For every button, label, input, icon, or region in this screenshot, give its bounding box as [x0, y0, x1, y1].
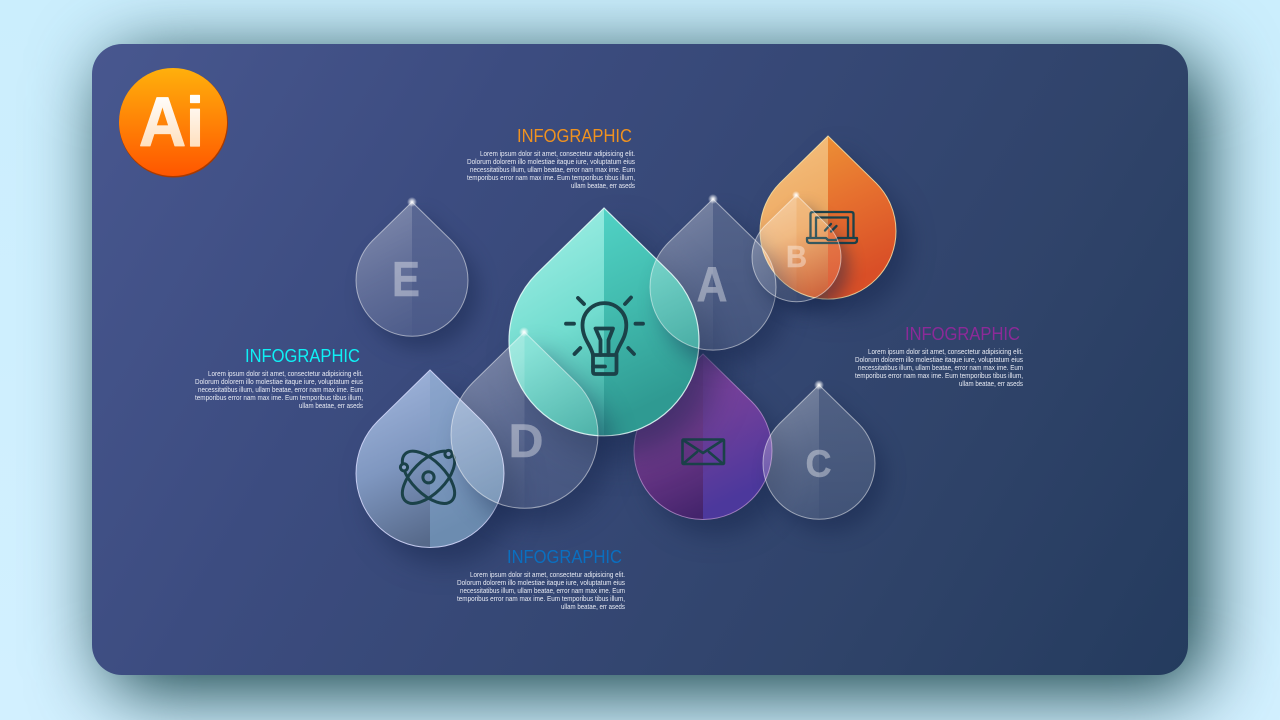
text block: orange, top: INFOGRAPHIC — [517, 125, 632, 146]
panel: main card — [92, 44, 1188, 675]
text block: blue, bottom — [457, 546, 625, 611]
letter D: D — [508, 415, 544, 468]
text block: cyan, left: Dolorum dolorem illo molestiae itaque iure, voluptatum eius — [195, 378, 363, 386]
icon: atom — [393, 442, 464, 512]
text block: cyan, left: necessitatibus illum, ullam beatae, error nam max ime. Eum — [198, 386, 363, 394]
text block: blue, bottom: temporibus error nam max ime. Eum temporibus tibus illum, — [457, 595, 625, 603]
drop: purple with envelope icon — [634, 354, 772, 519]
glint D — [519, 327, 529, 337]
drop: blue with atom icon — [356, 370, 504, 547]
drop: teal with lightbulb icon — [509, 208, 699, 436]
text block: orange, top: Lorem ipsum dolor sit amet, consectetur adipisicing elit. — [480, 150, 635, 158]
text block: orange, top — [467, 125, 635, 190]
icon: envelope — [682, 440, 724, 464]
glass drop A — [650, 199, 776, 350]
text block: cyan, left: ullam beatae, err aseds — [299, 402, 363, 410]
text block: orange, top: temporibus error nam max ime. Eum temporibus tibus illum, — [467, 174, 635, 182]
text block: blue, bottom: Lorem ipsum dolor sit amet, consectetur adipisicing elit. — [470, 571, 625, 579]
text block: blue, bottom: necessitatibus illum, ullam beatae, error nam max ime. Eum — [460, 587, 625, 595]
glint B — [792, 191, 800, 199]
icon: laptop — [807, 212, 857, 243]
text block: orange, top: necessitatibus illum, ullam beatae, error nam max ime. Eum — [470, 166, 635, 174]
glint A — [708, 194, 718, 204]
letter E: E — [392, 253, 420, 307]
letter C: C — [806, 444, 832, 486]
text block: purple, right: INFOGRAPHIC — [905, 323, 1020, 344]
icon: Adobe Illustrator logo — [119, 68, 228, 178]
drop: orange with laptop icon — [760, 136, 896, 299]
text block: blue, bottom: INFOGRAPHIC — [507, 546, 622, 567]
text block: cyan, left — [195, 345, 363, 410]
letter B: B — [786, 239, 807, 274]
letter A: A — [696, 258, 728, 312]
text block: cyan, left: INFOGRAPHIC — [245, 345, 360, 366]
glass drop D — [451, 332, 598, 508]
text block: cyan, left: temporibus error nam max ime. Eum temporibus tibus illum, — [195, 394, 363, 402]
text block: purple, right — [855, 323, 1023, 388]
text block: purple, right: Lorem ipsum dolor sit amet, consectetur adipisicing elit. — [868, 348, 1023, 356]
glass drop B — [752, 195, 841, 302]
text block: blue, bottom: ullam beatae, err aseds — [561, 603, 625, 611]
icon: lightbulb — [566, 298, 643, 374]
card shadow — [107, 59, 1203, 690]
text block: purple, right: temporibus error nam max ime. Eum temporibus tibus illum, — [855, 372, 1023, 380]
glass drop E — [356, 202, 468, 336]
text block: orange, top: ullam beatae, err aseds — [571, 182, 635, 190]
glint E — [407, 197, 417, 207]
text block: purple, right: necessitatibus illum, ullam beatae, error nam max ime. Eum — [858, 364, 1023, 372]
text block: cyan, left: Lorem ipsum dolor sit amet, consectetur adipisicing elit. — [208, 370, 363, 378]
text block: purple, right: ullam beatae, err aseds — [959, 380, 1023, 388]
icon: Adobe Illustrator logo: Ai — [139, 83, 204, 161]
text block: purple, right: Dolorum dolorem illo molestiae itaque iure, voluptatum eius — [855, 356, 1023, 364]
text block: orange, top: Dolorum dolorem illo molestiae itaque iure, voluptatum eius — [467, 158, 635, 166]
glass drop C — [763, 385, 875, 519]
text block: blue, bottom: Dolorum dolorem illo molestiae itaque iure, voluptatum eius — [457, 579, 625, 587]
glint C — [814, 380, 824, 390]
